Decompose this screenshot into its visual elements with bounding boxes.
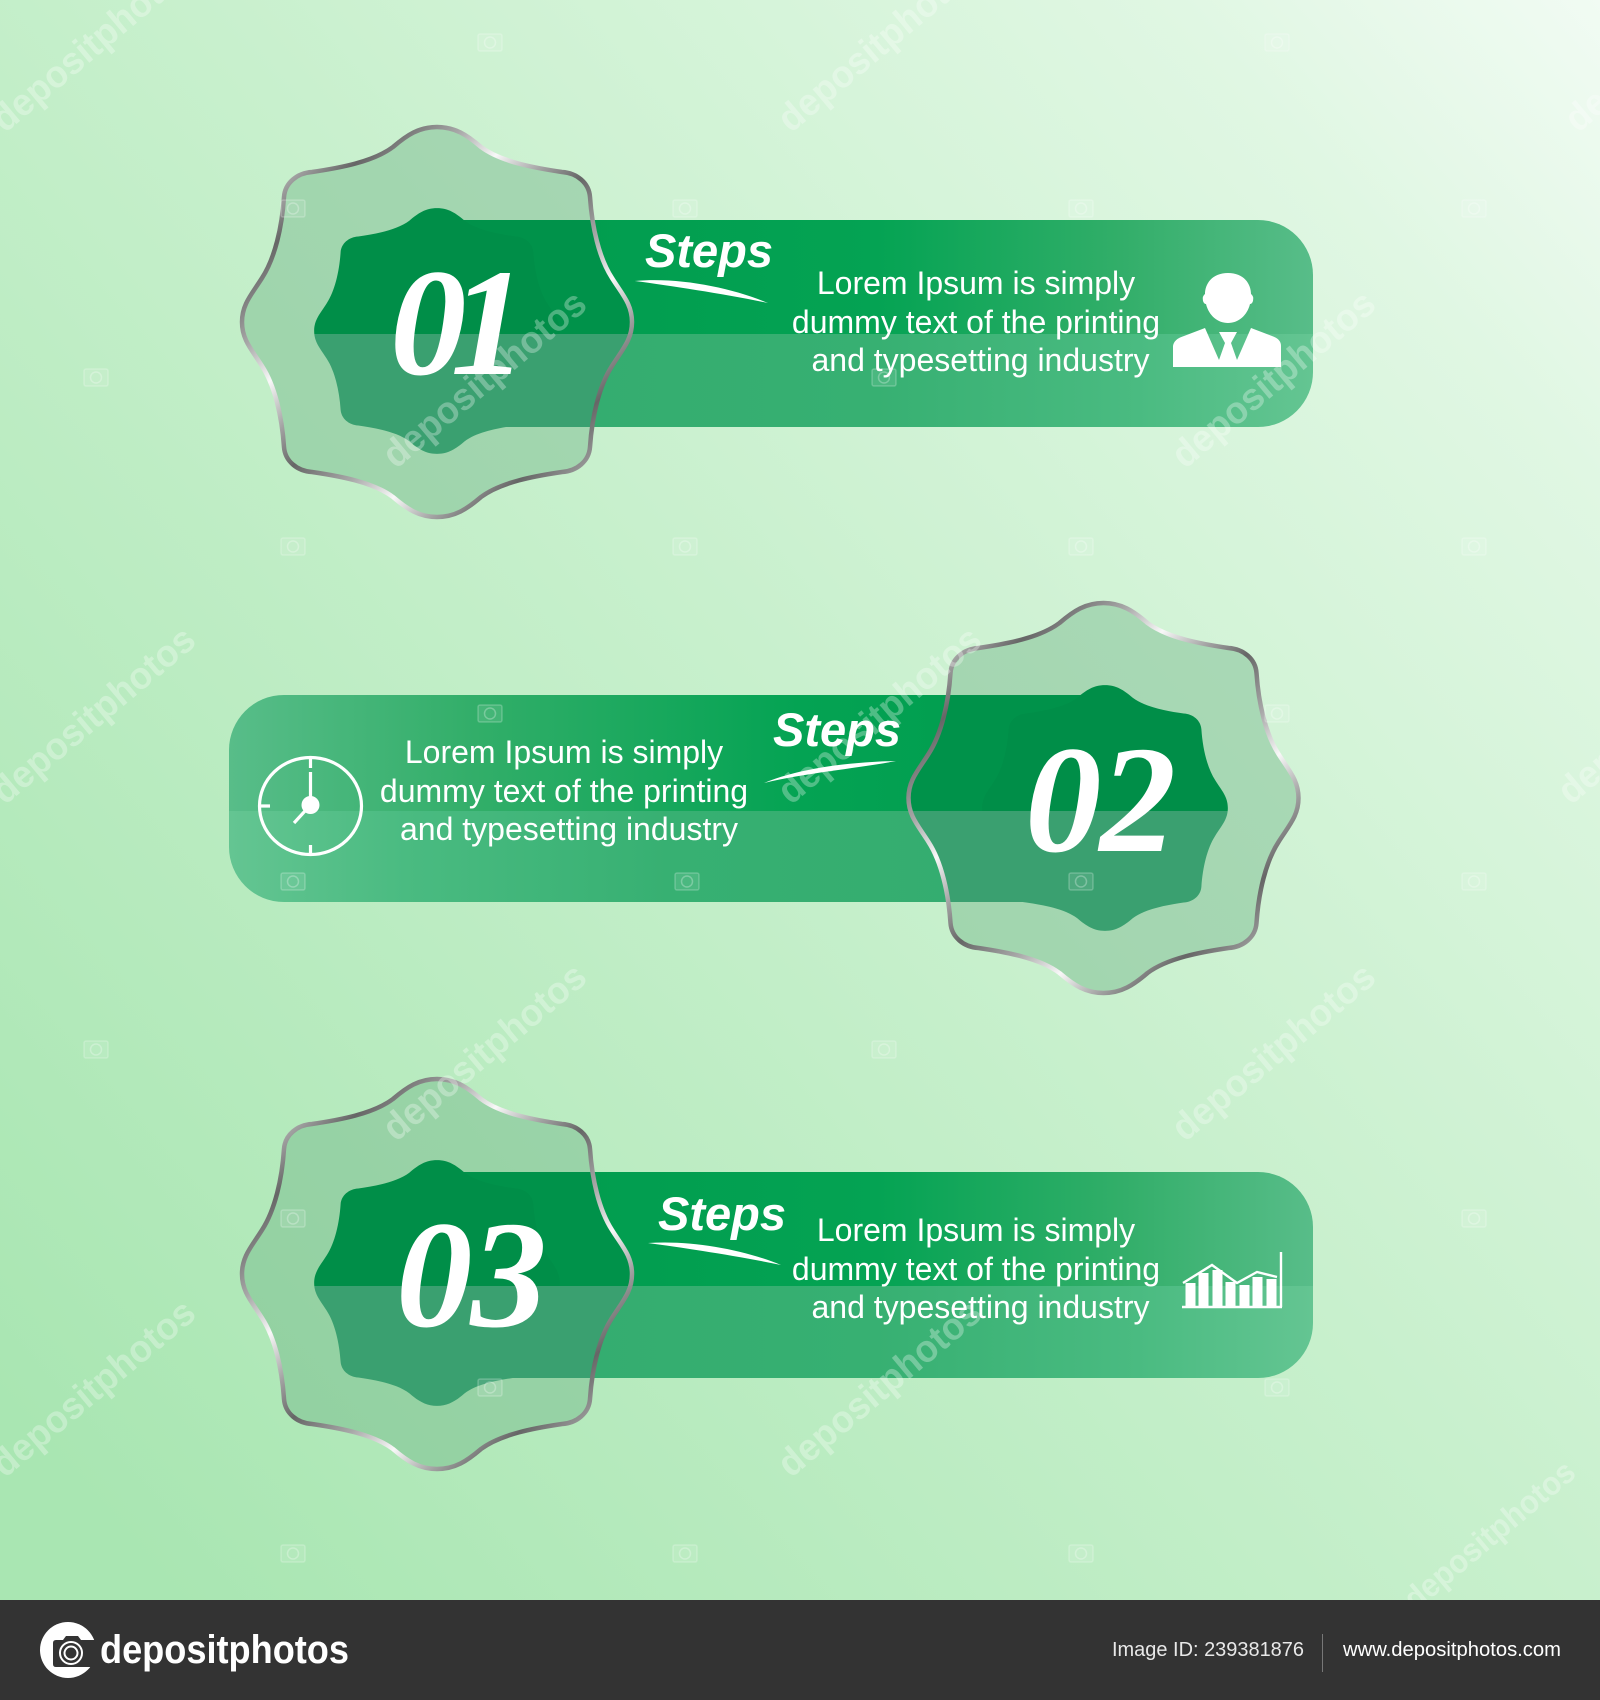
watermark text overlay: depositphotos [375, 282, 595, 477]
band: step 01 [440, 220, 1313, 427]
heading: steps 1: Steps [645, 224, 773, 277]
watermark text overlay: depositphotos [1164, 955, 1384, 1150]
watermark text overlay: depositphotos [770, 618, 990, 813]
watermark text overlay: depositphotos [770, 1291, 990, 1486]
text block 1 [792, 265, 1160, 378]
text block 1: and typesetting industry [812, 342, 1149, 378]
text block 2: dummy text of the printing [380, 773, 748, 809]
swoosh 1 [635, 280, 768, 303]
footer logo [40, 1622, 349, 1678]
panel: step 02 [229, 603, 1298, 993]
heading: steps 3: Steps [658, 1187, 786, 1240]
watermark text overlay: depositphotos [1396, 1453, 1582, 1617]
image id: Image ID: 239381876 [1112, 1639, 1304, 1661]
text block 1: dummy text of the printing [792, 304, 1160, 340]
watermark text overlay: depositphotos [375, 955, 595, 1150]
text block 3: Lorem Ipsum is simply [817, 1212, 1135, 1248]
swoosh 3 [648, 1242, 781, 1265]
footer logo: depositphotos [100, 1628, 349, 1672]
badge: 01 [242, 127, 660, 517]
panel: step 01 [242, 127, 1313, 517]
text block 1: Lorem Ipsum is simply [817, 265, 1135, 301]
icon: clock [258, 757, 362, 855]
text block 2 [380, 734, 748, 847]
text block 2: Lorem Ipsum is simply [405, 734, 723, 770]
icon: bar chart [1182, 1252, 1282, 1307]
badge: 01: 01 [390, 239, 512, 408]
heading: steps 2: Steps [773, 703, 901, 756]
watermark camera icons [84, 34, 1486, 1562]
footer bar [0, 1600, 1600, 1700]
website: www.depositphotos.com [1342, 1639, 1561, 1661]
band: step 03 [440, 1172, 1313, 1378]
text block 3: and typesetting industry [812, 1289, 1149, 1325]
badge: 03: 03 [396, 1191, 545, 1360]
text block 3: dummy text of the printing [792, 1251, 1160, 1287]
text block 2: and typesetting industry [400, 811, 738, 847]
band: step 02 [229, 695, 1105, 902]
icon: businessman [1173, 273, 1281, 367]
badge: 03 [242, 1079, 660, 1469]
swoosh 2 [764, 761, 896, 783]
badge: 02: 02 [1025, 716, 1174, 885]
watermark text overlay: depositphotos [1164, 282, 1384, 477]
panel: step 03 [242, 1079, 1313, 1469]
badge: 02 [890, 603, 1298, 993]
text block 3 [792, 1212, 1160, 1325]
